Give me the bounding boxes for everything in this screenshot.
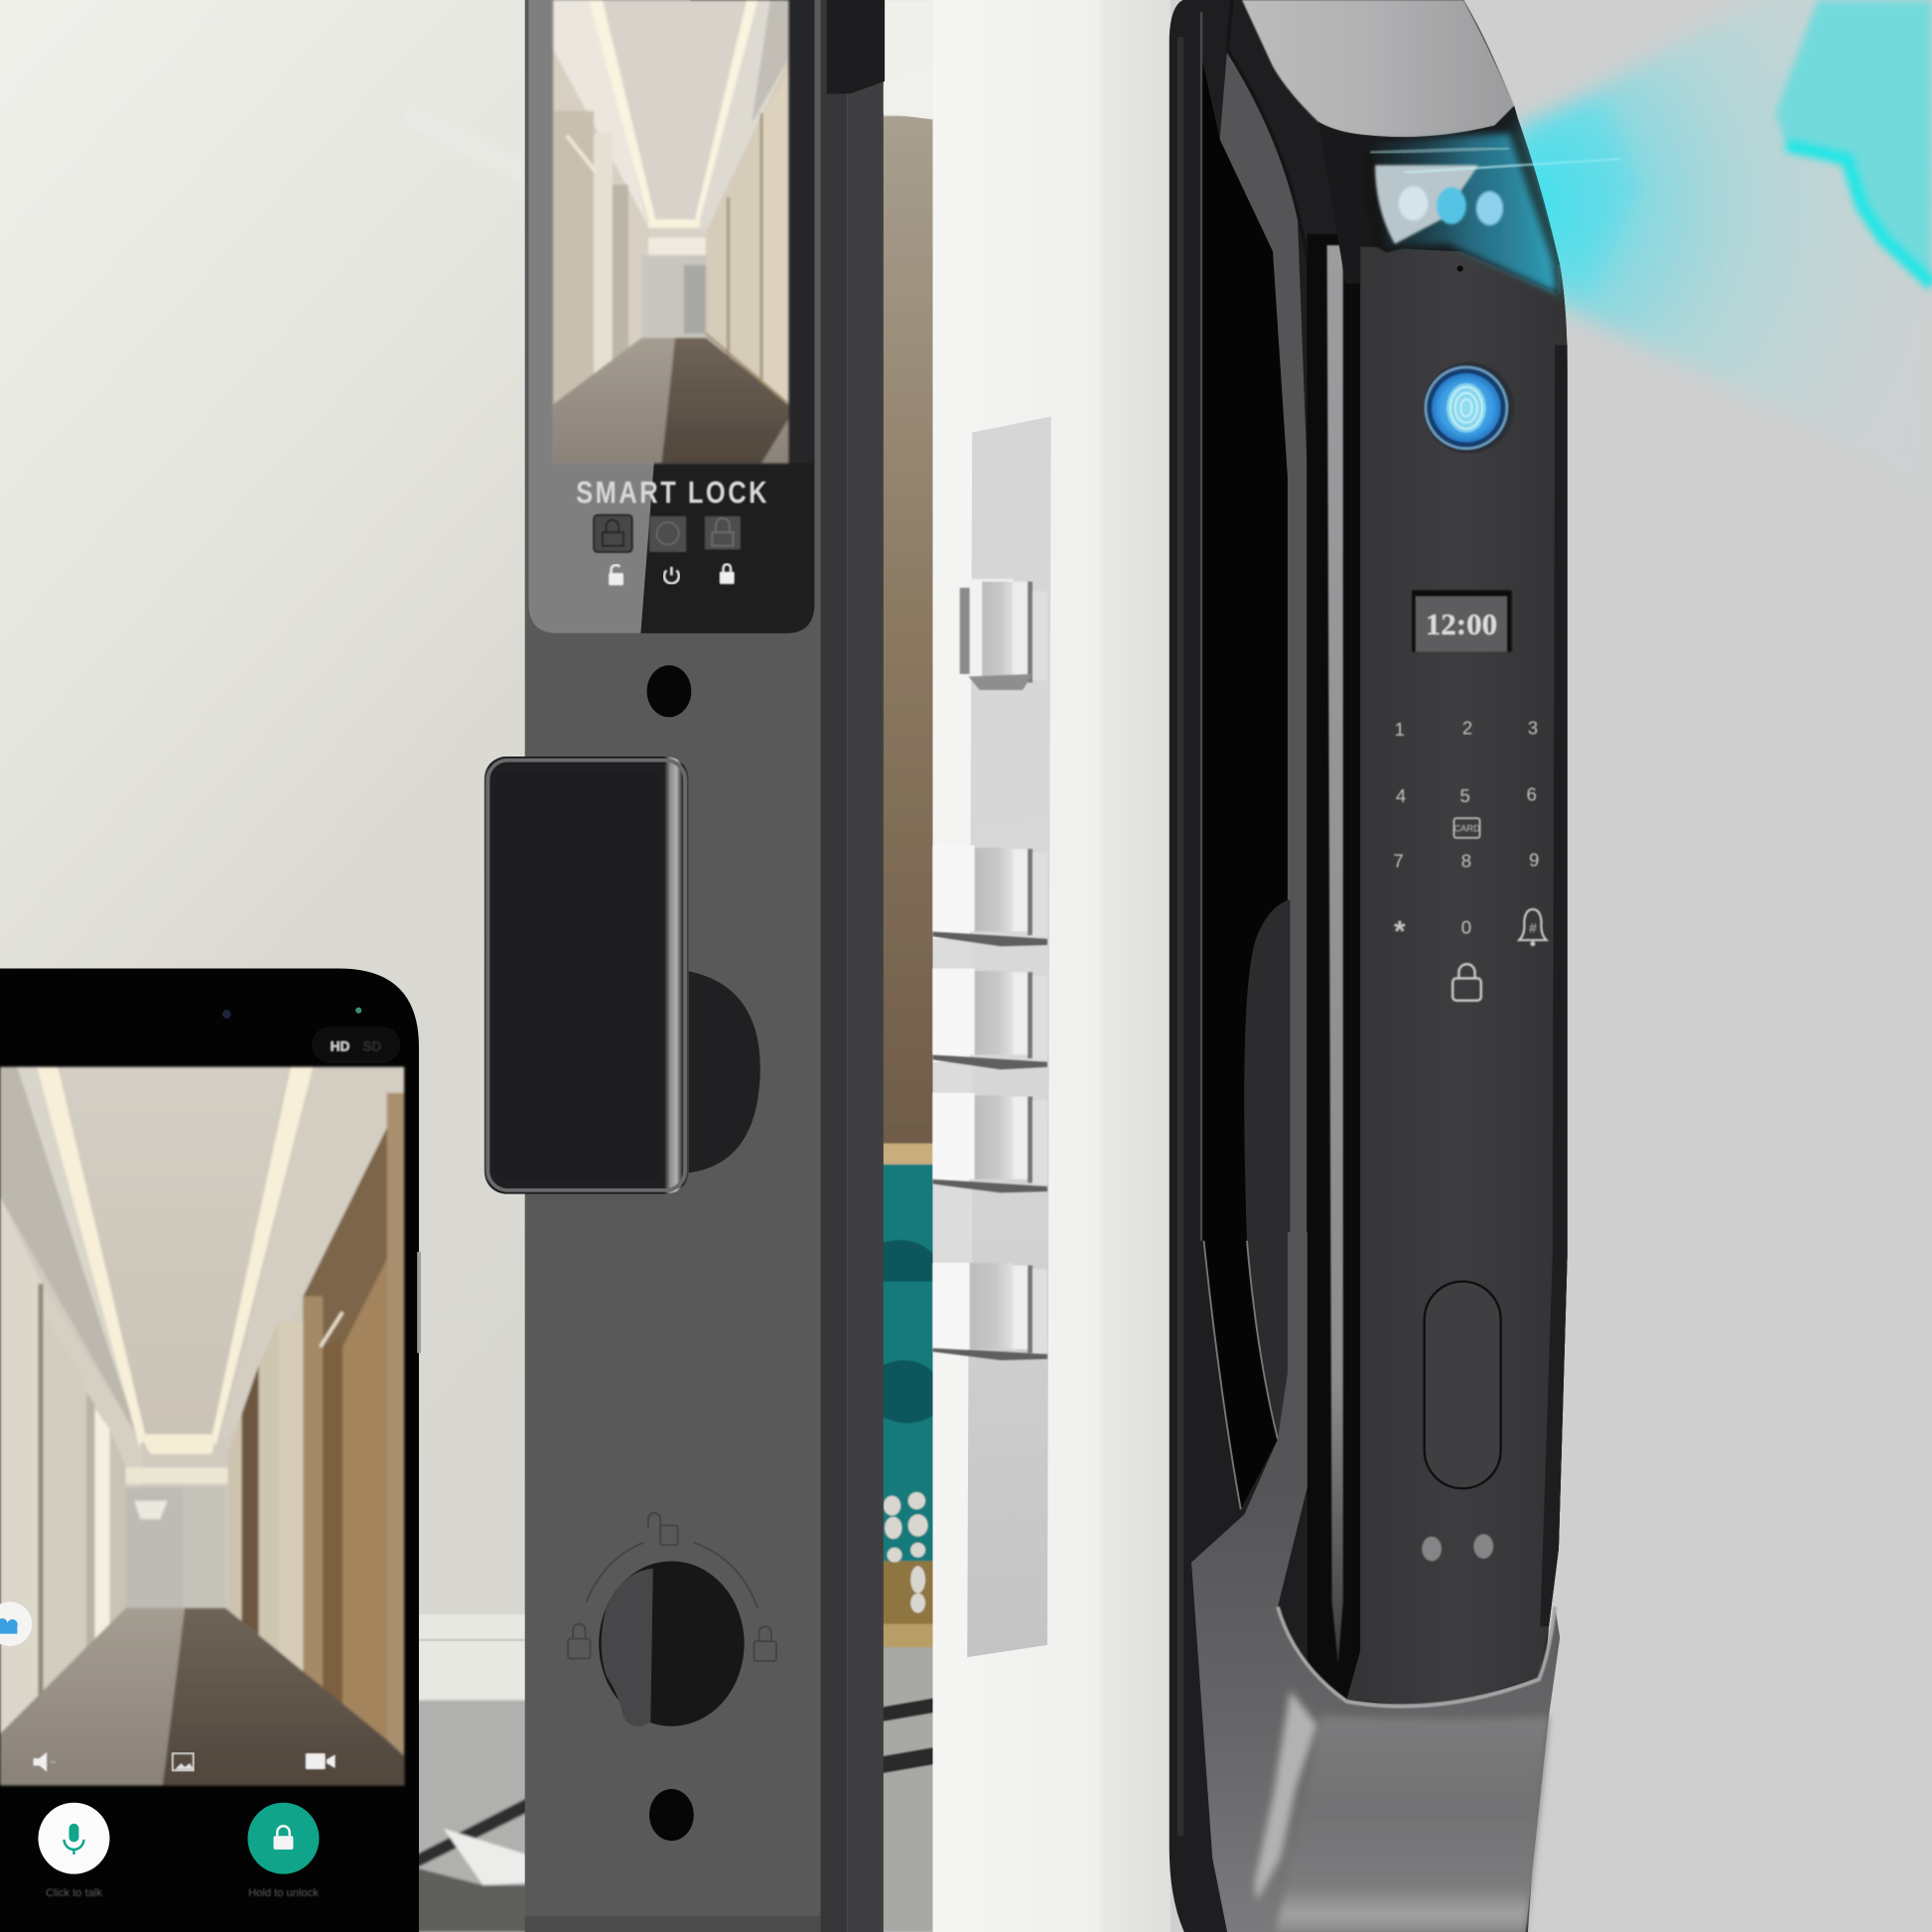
cloud bubble	[0, 1601, 32, 1646]
dead bolt 4	[932, 1263, 1047, 1360]
corridor video feed	[0, 1067, 404, 1785]
time display: 12:00	[1426, 607, 1497, 641]
corridor video on lock screen	[553, 0, 788, 464]
HD SD toggle: HD	[331, 1039, 350, 1054]
dead bolt 2	[932, 968, 1047, 1069]
keypad: 5	[1459, 785, 1470, 806]
keypad: 4	[1396, 785, 1406, 806]
keypad: 0	[1461, 917, 1471, 938]
front camera	[222, 1010, 231, 1019]
right wall background	[1171, 0, 1932, 1932]
left wall background	[0, 0, 530, 1932]
center strips	[1308, 234, 1361, 1701]
keypad: 8	[1461, 851, 1471, 872]
marble floor	[416, 1701, 530, 1932]
keypad: *	[1394, 915, 1406, 948]
strike plate	[967, 416, 1051, 1657]
microphone button	[38, 1803, 109, 1874]
door edge interior view	[878, 0, 934, 1932]
lock key	[705, 516, 741, 550]
latch bolt	[960, 579, 1047, 690]
unlock indicator	[609, 565, 623, 586]
unlock caption: Hold to unlock	[248, 1887, 319, 1899]
mute icon	[34, 1752, 56, 1772]
sensor dots	[1422, 1534, 1493, 1561]
status light	[355, 1008, 361, 1014]
fingerprint sensor	[1423, 362, 1514, 454]
power indicator	[664, 567, 679, 584]
keypad: 3	[1528, 718, 1538, 739]
unlock key	[594, 515, 632, 552]
video icon	[306, 1753, 336, 1769]
smart lock front plate	[525, 0, 885, 1932]
picture icon	[173, 1753, 194, 1770]
upper mounting hole	[647, 665, 691, 717]
exterior handle with spindle	[484, 757, 760, 1194]
handle bulge	[1244, 899, 1290, 1440]
SMART LOCK lettering: SMART LOCK	[576, 475, 769, 509]
card reader mark	[1453, 818, 1480, 838]
keypad: 2	[1462, 718, 1472, 739]
top dome	[1242, 0, 1514, 137]
outer frame	[1170, 0, 1568, 1932]
keypad: 9	[1529, 849, 1539, 870]
control panel	[1346, 234, 1568, 1708]
metal handle grip	[1191, 1232, 1560, 1932]
inner handle band	[1220, 50, 1308, 1487]
lock touch screen	[528, 0, 814, 633]
mortise side panel	[884, 0, 1172, 1932]
lock key	[1452, 964, 1481, 1001]
smartphone with app	[0, 968, 419, 1932]
keypad: 7	[1393, 851, 1404, 872]
thumb turn knob	[568, 1513, 776, 1726]
dead bolt 3	[932, 1093, 1047, 1192]
handle recess	[1202, 62, 1288, 1509]
keypad	[1393, 718, 1547, 1001]
beam over camera edge	[1516, 98, 1639, 296]
time display	[1412, 590, 1512, 652]
keypad: 1	[1395, 719, 1405, 740]
HD SD toggle: SD	[362, 1039, 381, 1054]
face recognition camera	[1363, 111, 1620, 293]
doorbell key: #	[1529, 920, 1537, 935]
dark top of panel	[1318, 106, 1560, 283]
lower mounting hole	[649, 1789, 694, 1841]
face scan light beam	[1497, 0, 1932, 505]
unlock button	[247, 1803, 319, 1874]
lock indicator	[720, 564, 735, 584]
3D face mesh	[1775, 0, 1932, 339]
smart lock interior view	[1170, 0, 1620, 1932]
HD SD toggle	[313, 1028, 399, 1062]
power key	[649, 516, 686, 552]
card reader mark: CARD	[1453, 824, 1480, 834]
key slot cover	[1425, 1282, 1501, 1488]
dead bolt 1	[932, 845, 1047, 946]
keypad: 6	[1526, 784, 1537, 805]
doorbell key	[1519, 909, 1547, 946]
talk caption: Click to talk	[46, 1887, 102, 1899]
